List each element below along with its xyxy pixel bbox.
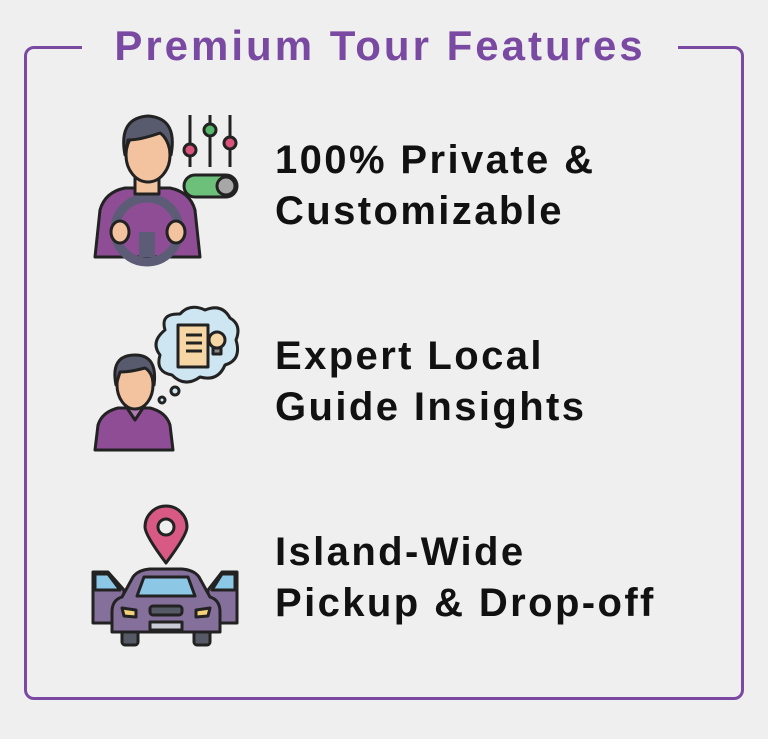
text: private <box>275 138 595 233</box>
text: pickup: Island-Wide <box>275 530 526 574</box>
title: Premium Tour Features <box>114 22 646 69</box>
text: pickup: Pickup & Drop-off <box>275 581 656 625</box>
text: private: Customizable <box>275 189 564 233</box>
text: guide: Expert Local <box>275 334 544 378</box>
text: guide: Guide Insights <box>275 385 586 429</box>
text: pickup <box>275 530 656 625</box>
text: guide <box>275 334 586 429</box>
text: private: 100% Private & <box>275 138 595 182</box>
